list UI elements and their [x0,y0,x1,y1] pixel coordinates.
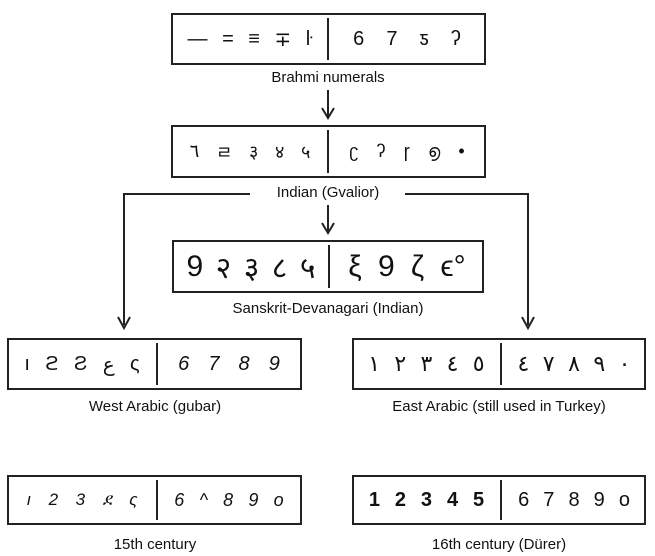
panel: West Arabic: 8 [239,352,250,374]
panel: 16th century (Dürer): 1 [369,488,380,510]
label: 15th century: 15th century [114,536,196,553]
panel: Sanskrit-Devanagari: ξ [348,250,362,282]
panel: 15th century: 2 [49,490,58,509]
label: 16th century: 16th century (Dürer) [432,536,566,553]
panel: 16th century (Dürer): o [619,488,630,510]
panel: 16th century (Dürer): 4 [447,488,458,510]
panel: Sanskrit-Devanagari: ζ [411,250,424,282]
panel: Indian (Gvalior): ٦ [190,141,199,161]
panel: 15th century: 3 [76,490,85,509]
panel: Brahmi numerals: 6 [353,28,364,50]
arrow 2 [321,205,335,235]
panel: Brahmi numerals: = [222,28,234,50]
panel: 16th century (Dürer): 2 [395,488,406,510]
panel: East Arabic: ٨ [568,351,580,376]
panel: West Arabic: ϩ [45,352,59,374]
panel: 16th century (Dürer): 3 [421,488,432,510]
panel: East Arabic: ٤ [517,351,529,376]
panel: Sanskrit-Devanagari: ३ [244,252,259,285]
connector: right branch arrow [405,193,535,330]
panel: 16th century (Dürer): 7 [543,488,554,510]
panel: Sanskrit-Devanagari: २ [216,252,231,285]
panel: Brahmi numerals: ƽ [420,28,429,50]
connector: left branch arrow [117,193,250,330]
panel: 15th century: ደ [102,490,112,509]
panel: 15th century: ς [129,490,137,509]
label: Sanskrit-Devanagari: Sanskrit-Devanagari (Indian) [233,300,423,317]
panel: West Arabic [7,338,302,390]
panel: East Arabic: ٥ [473,351,485,376]
panel: 16th century (Dürer): 6 [518,488,529,510]
panel: Brahmi numerals: ʔ [451,28,461,50]
panel: East Arabic: ٢ [394,351,406,376]
panel: 16th century (Dürer): 5 [473,488,484,510]
panel: 15th century: ^ [199,490,208,510]
panel: 16th century (Dürer): 8 [568,488,580,510]
panel: West Arabic: 9 [269,352,280,374]
panel: 15th century: 6 [174,490,184,510]
panel: East Arabic: ٣ [421,351,432,376]
panel: Indian (Gvalior): ʗ [349,141,358,161]
panel: West Arabic: ı [24,352,30,374]
panel: 15th century [7,475,302,525]
panel: Sanskrit-Devanagari: 9 [186,250,203,282]
panel: East Arabic: ٤ [447,351,458,376]
panel: Sanskrit-Devanagari: ८ [272,252,287,285]
panel: Indian (Gvalior): ㄹ [216,142,232,162]
panel: Indian (Gvalior): • [458,141,465,161]
panel: West Arabic: Ƨ [74,352,87,374]
panel: Brahmi numerals: ≡ [248,28,260,50]
panel: Sanskrit-Devanagari: ϵ° [440,250,466,282]
label: Brahmi numerals: Brahmi numerals [271,69,385,86]
panel: West Arabic: ς [130,352,140,374]
arrow 1 [321,90,335,120]
panel: Sanskrit-Devanagari: ५ [300,252,315,285]
panel: 15th century: ı [26,490,31,509]
panel: 15th century: o [274,490,284,510]
panel: West Arabic: 6 [178,352,189,374]
panel: Indian (Gvalior): ५ [301,142,310,162]
panel: Indian (Gvalior): ʔ [376,141,385,161]
panel: 15th century: 9 [248,490,258,510]
panel: East Arabic: ٠ [619,351,630,376]
panel: Indian (Gvalior): ३ [249,142,258,162]
panel: 15th century: 8 [223,490,233,510]
panel: West Arabic: 7 [208,352,219,374]
panel: Brahmi numerals: ∓ [274,28,291,50]
panel: Indian (Gvalior): ൭ [428,141,440,161]
panel: 16th century (Dürer) [352,475,646,525]
panel: East Arabic: ١ [368,351,380,376]
panel: Indian (Gvalior): ɼ [404,141,410,161]
panel: Sanskrit-Devanagari: 9 [378,250,395,282]
panel: Brahmi numerals: 7 [386,28,397,50]
panel: Sanskrit-Devanagari [172,240,484,293]
panel: Brahmi numerals: ŀ [306,28,312,50]
panel: Brahmi numerals: — [188,28,208,50]
panel: 16th century (Dürer): 9 [594,488,605,510]
panel: Brahmi numerals [171,13,486,65]
panel: West Arabic: ع [103,354,115,376]
panel: Indian (Gvalior) [171,125,486,178]
label: West Arabic: West Arabic (gubar) [89,398,221,415]
panel: East Arabic [352,338,646,390]
panel: East Arabic: ٩ [593,351,605,376]
panel: East Arabic: ٧ [543,351,555,376]
label: East Arabic: East Arabic (still used in Turkey) [392,398,606,415]
label: Indian (Gvalior): Indian (Gvalior) [277,184,379,201]
panel: Indian (Gvalior): ४ [275,142,284,162]
